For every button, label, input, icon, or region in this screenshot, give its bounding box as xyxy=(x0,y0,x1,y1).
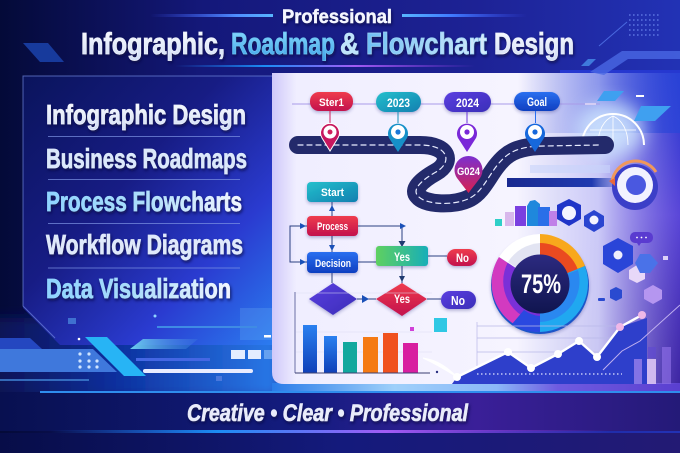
right mini bars and trend line xyxy=(603,305,680,384)
list dividers xyxy=(48,136,240,268)
bar chart xyxy=(295,292,447,373)
flow node: purple diamond xyxy=(309,283,357,315)
chat bubble icon xyxy=(630,232,653,246)
milestone: Goal: Goal xyxy=(527,97,547,109)
gear icons xyxy=(557,199,604,232)
footer top line xyxy=(40,391,680,393)
panel: lower-left tech band xyxy=(0,318,280,398)
top-right tech decoration xyxy=(581,15,680,75)
roadmap connector xyxy=(292,103,600,105)
flow node: Decision xyxy=(307,252,358,273)
top-left parallelogram xyxy=(23,43,64,62)
hexagon icons xyxy=(598,238,668,304)
blue accent shapes xyxy=(585,91,671,121)
flowchart arrowheads xyxy=(300,205,406,303)
flow node: Process xyxy=(307,216,358,236)
flow node: Yes xyxy=(376,246,428,266)
milestone: Ster1 xyxy=(310,92,353,151)
flow node: Yes diamond xyxy=(376,283,427,316)
title xyxy=(81,26,574,61)
flow node: No purple xyxy=(441,291,476,309)
flowchart connectors xyxy=(290,202,447,299)
milestone: 2023 xyxy=(376,92,421,152)
flow node: Yes diamond: Yes xyxy=(394,292,410,306)
item: Business Roadmaps: Business Roadmaps xyxy=(46,143,247,174)
title: Infographic, xyxy=(81,26,225,61)
title: Design xyxy=(494,26,574,61)
target icon xyxy=(609,161,658,210)
footer bottom line xyxy=(50,430,610,433)
item: Data Visualization: Data Visualization xyxy=(46,273,231,304)
flow node: No xyxy=(447,249,477,266)
right side purple background xyxy=(560,70,680,392)
milestone: 2023: 2023 xyxy=(387,98,410,110)
donut: orange segment xyxy=(540,234,585,284)
lower background strip xyxy=(0,433,680,453)
lower-left tech decoration xyxy=(0,308,272,381)
services list xyxy=(46,99,247,304)
panel: footer band xyxy=(0,392,680,431)
milestone: 2024 xyxy=(444,92,491,152)
mini bar cluster xyxy=(495,200,557,226)
flow node: Yes: Yes xyxy=(394,250,410,264)
milestone: 2024: 2024 xyxy=(456,98,480,110)
flow node: Process: Process xyxy=(317,221,348,233)
flow node: No purple: No xyxy=(451,294,465,308)
donut: purple segment xyxy=(492,257,540,332)
donut chart: 75% xyxy=(521,269,561,299)
milestone pin: G024 xyxy=(454,156,482,193)
donut chart xyxy=(491,234,589,334)
title: Roadmap xyxy=(231,26,335,61)
panel: light workspace xyxy=(272,73,680,392)
heading: Professional xyxy=(150,7,527,28)
item: Process Flowcharts: Process Flowcharts xyxy=(46,186,242,217)
road xyxy=(298,145,605,203)
donut: white segment xyxy=(499,234,540,284)
milestone pin: G024: G024 xyxy=(457,166,481,178)
flow node: Start: Start xyxy=(321,187,344,199)
item: Infographic Design: Infographic Design xyxy=(46,99,246,130)
title: Flowchart xyxy=(366,26,487,61)
title: & xyxy=(340,26,359,61)
flow node: Decision: Decision xyxy=(315,258,351,270)
milestone: Ster1: Ster1 xyxy=(319,97,344,109)
panel: services list background xyxy=(23,76,272,345)
flow node: No: No xyxy=(456,251,469,265)
item: Workflow Diagrams: Workflow Diagrams xyxy=(46,229,243,260)
panel frame line xyxy=(23,76,272,338)
milestone: Goal xyxy=(514,92,560,152)
title underline xyxy=(175,65,475,67)
flow node: Start xyxy=(307,182,358,202)
road side bar xyxy=(507,165,613,187)
globe xyxy=(582,114,644,145)
heading: Professional: Professional xyxy=(282,7,392,28)
footer tagline: Creative • Clear • Professional xyxy=(187,400,469,427)
donut: blue segment xyxy=(540,266,588,332)
line area chart xyxy=(423,311,647,384)
